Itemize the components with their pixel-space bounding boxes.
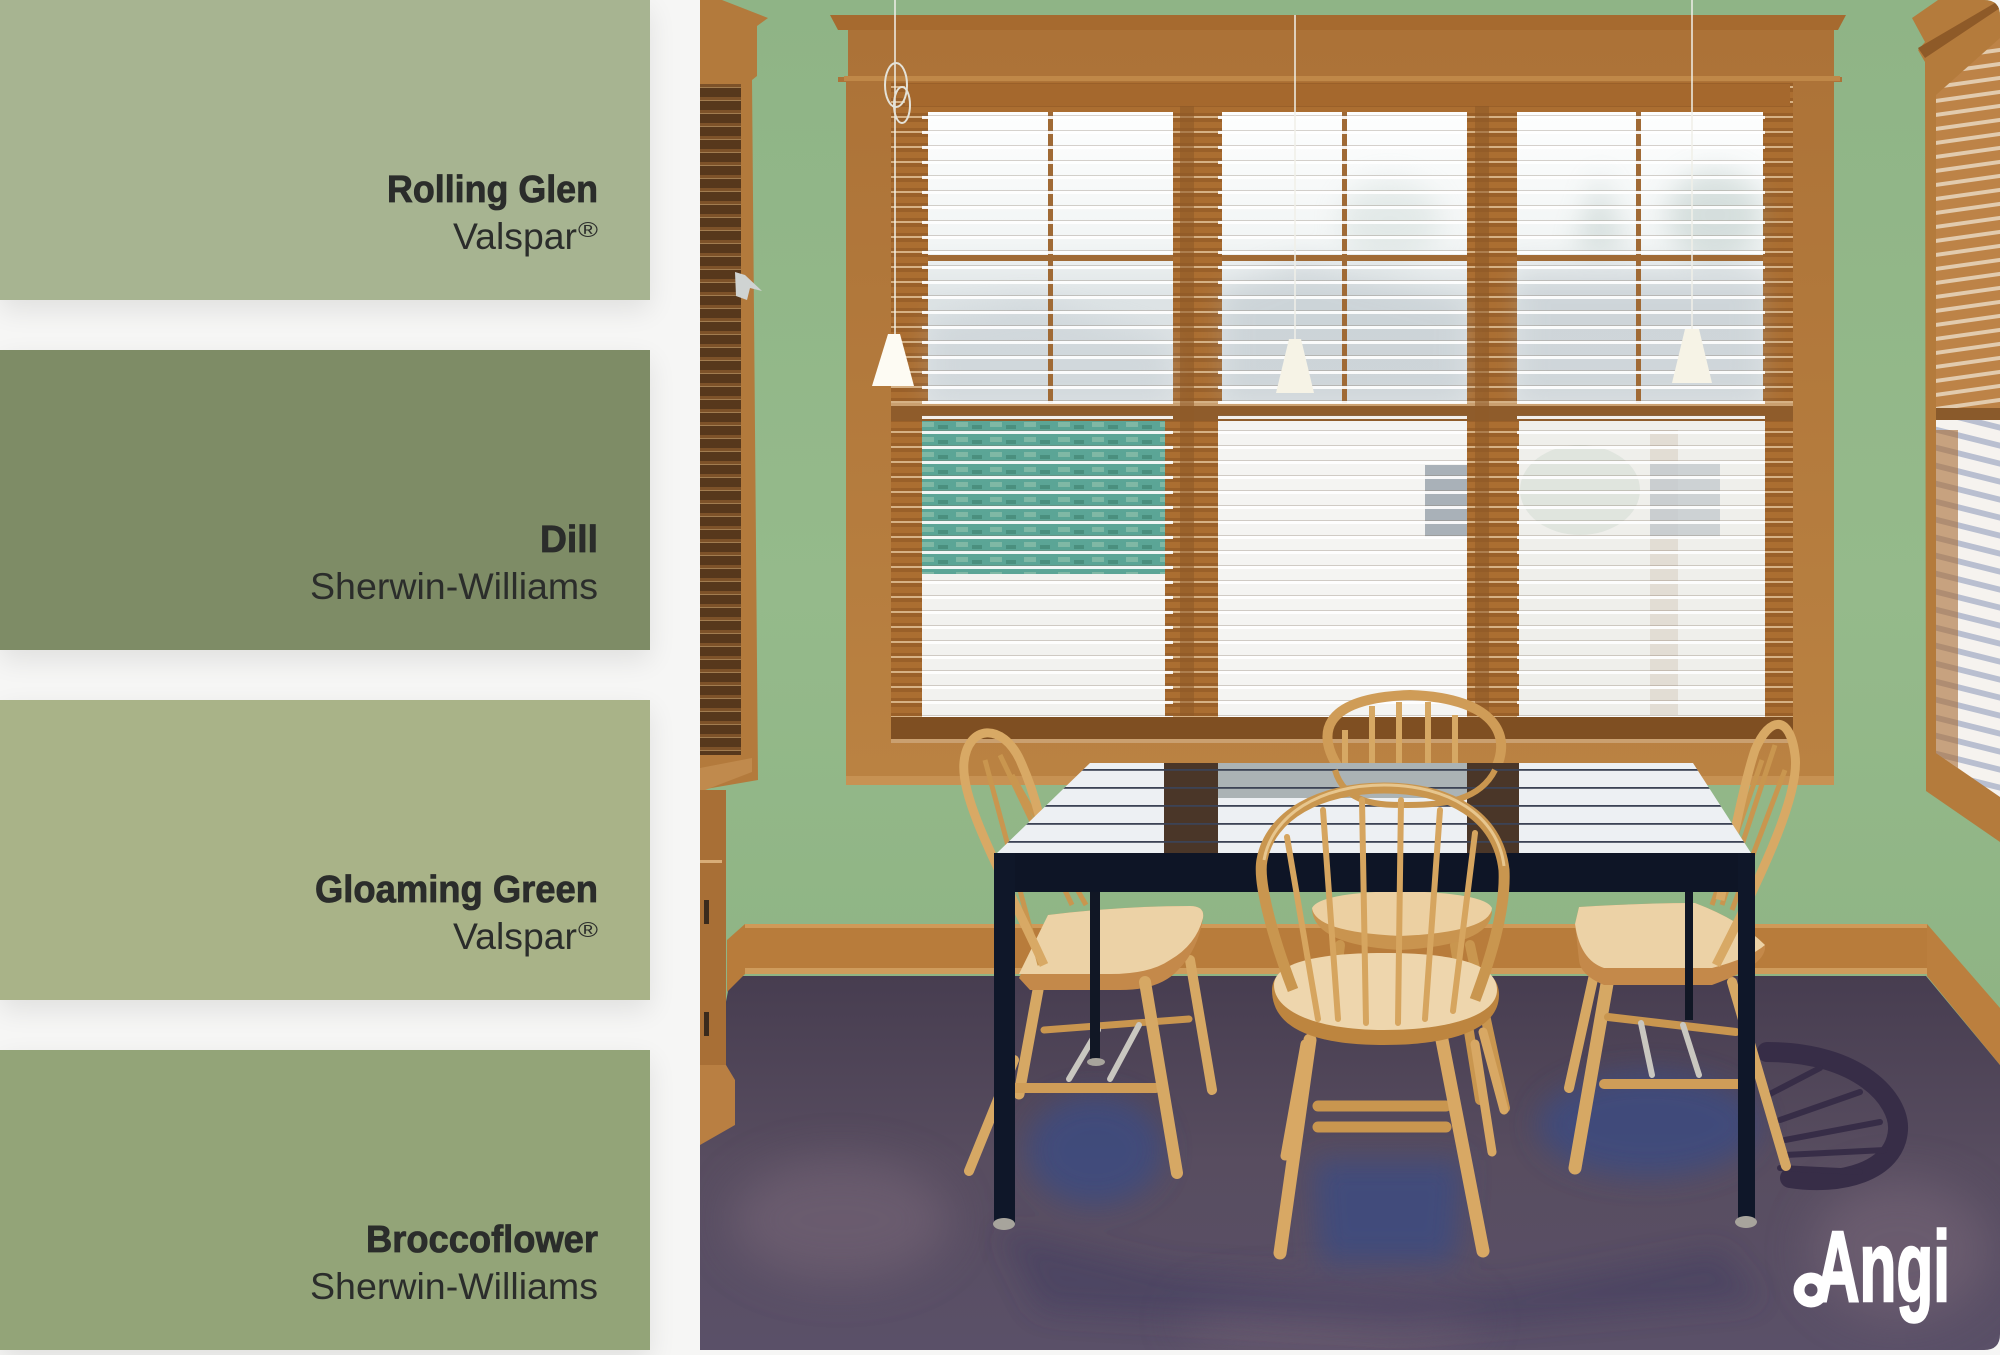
text: Broccoflower label: Sherwin-Williams (310, 1266, 598, 1307)
panel: Dill swatch (0, 350, 650, 650)
front chair (1261, 785, 1504, 1253)
dining table (980, 763, 1780, 1230)
text: Gloaming Green label (315, 869, 599, 957)
left window (700, 0, 768, 792)
meeting rail (891, 405, 1793, 421)
cabinet (700, 790, 735, 1145)
muntins (928, 112, 1763, 403)
text: Broccoflower label (310, 1219, 598, 1307)
text: Dill label: Sherwin-Williams (310, 566, 598, 607)
text: Dill label (310, 519, 598, 607)
left chair (964, 733, 1212, 1173)
right chair (1569, 724, 1796, 1168)
wall (700, 0, 2000, 1075)
text: Rolling Glen label: Valspar (453, 216, 577, 257)
text: Gloaming Green label: ® (578, 919, 599, 942)
text: Rolling Glen label: ® (578, 219, 599, 242)
floor light patches (730, 1160, 1990, 1350)
floor shadows (1000, 1073, 1760, 1330)
floor (700, 976, 2000, 1350)
panel: dining room photo (700, 0, 2000, 1350)
Angi logo (1794, 1227, 1946, 1324)
faint scene behind upper panes (928, 170, 1763, 403)
blind slats over panes (922, 106, 1765, 717)
pendant lamps (872, 0, 1712, 393)
far chair (1312, 695, 1505, 1108)
panel: Broccoflower swatch (0, 1050, 650, 1350)
text: Gloaming Green label: Gloaming Green (315, 869, 598, 911)
right chair-back floor shadow (1767, 1052, 1898, 1180)
baseboard (727, 924, 2000, 1065)
text: Rolling Glen label (387, 169, 599, 257)
center window casing (830, 15, 1846, 785)
text: Rolling Glen label: Rolling Glen (387, 169, 598, 211)
sill (891, 717, 1793, 739)
window opening with blinds (891, 82, 1793, 743)
text: Gloaming Green label: Valspar (453, 916, 577, 957)
panel: Gloaming Green swatch (0, 700, 650, 1000)
text: Dill label: Dill (540, 519, 598, 561)
upper panes (928, 112, 1763, 403)
text: Broccoflower label: Broccoflower (366, 1219, 598, 1261)
panel: Rolling Glen swatch (0, 0, 650, 300)
right window (1912, 0, 2000, 842)
mullions (1180, 106, 1489, 716)
lower panes (922, 574, 1165, 717)
